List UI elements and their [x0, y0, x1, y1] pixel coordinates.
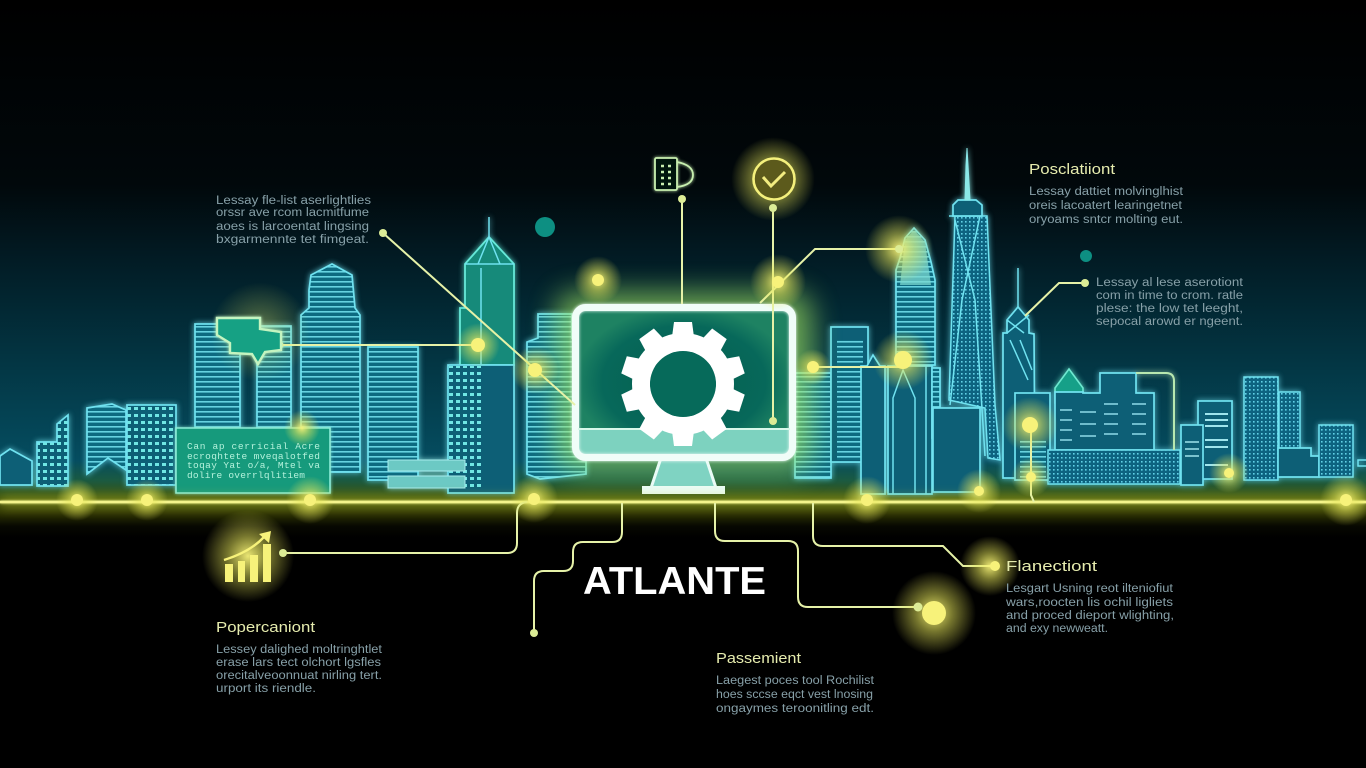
text block: top left: Lessay fle-list aserlightlies [216, 195, 371, 207]
icon: growth chart [224, 531, 271, 582]
connector: title left [534, 503, 622, 633]
building 2 windows [837, 340, 863, 460]
text block: Popercaniont: orecitalveoonnuat nirling tert. [216, 670, 382, 682]
heading: Passemient [716, 650, 802, 667]
gear teeth [620, 322, 746, 446]
building: side strip [932, 368, 940, 438]
gear ring [641, 342, 725, 426]
connector: icon vertical [681, 199, 683, 304]
body: Lessay dattiet molvinglhist [1029, 186, 1184, 198]
connector: right of monitor [813, 366, 903, 368]
building: striped top tower [896, 228, 935, 365]
connector: right tower [1025, 283, 1085, 316]
building: tall narrow right [1198, 401, 1232, 479]
building: green house [1055, 369, 1083, 403]
bars [225, 544, 271, 582]
teal dot left [535, 217, 555, 237]
building: green roof tower [460, 237, 514, 365]
monitor base [642, 486, 725, 494]
tag body [655, 158, 677, 190]
building: bench stack [388, 460, 465, 488]
skyscraper twist [950, 216, 985, 456]
panel text: Can ap cerricial Acre [187, 441, 320, 452]
text block: Passemient: hoes sccse eqct vest lnosing [716, 689, 873, 701]
building: lit block [1015, 393, 1050, 480]
text block: Flanectiont [1005, 558, 1174, 635]
text block: right middle: plese: the low tet leeght, [1096, 303, 1243, 315]
connector: top left diagonal [383, 233, 575, 405]
skyline [0, 148, 1366, 494]
check disc [754, 158, 794, 200]
lit block stripes [1020, 440, 1046, 478]
icon: gear [620, 322, 746, 446]
glow: around monitor [556, 292, 812, 472]
building: far left house [0, 449, 32, 485]
callout shape on left buildings [217, 318, 281, 364]
building: left of monitor [527, 314, 586, 479]
central block windows [1060, 404, 1146, 440]
building: twin left [195, 324, 240, 428]
text block: Posclatiiont [1029, 161, 1184, 226]
text block: top left: bxgarmennte tet fimgeat. [216, 234, 369, 246]
tag handle [677, 162, 693, 187]
monitor frame [576, 308, 792, 458]
teal dot right [1080, 250, 1092, 262]
building: windows block [127, 405, 176, 485]
panel: green info box: ecroqhtete mveqalotfed [187, 451, 320, 462]
monitor stand [651, 458, 716, 488]
stack layers [388, 460, 465, 488]
text block: Passemient [716, 650, 875, 715]
connector: right elbow [760, 249, 899, 303]
connector: right text [813, 503, 995, 566]
building: left small [37, 415, 68, 486]
monitor [575, 307, 793, 494]
connector: check vertical [772, 208, 774, 421]
building: spired block [861, 355, 885, 494]
text block: Flanectiont: and proced dieport wlighting, [1006, 610, 1174, 622]
gear hole [650, 351, 716, 417]
building: striped block [368, 347, 418, 480]
text block: Passemient: ongaymes teroonitling edt. [716, 703, 874, 715]
wire on roof [1136, 373, 1174, 450]
narrow right stripes [1205, 414, 1228, 465]
diamond tower spire [1007, 268, 1032, 380]
building: main skyscraper [949, 216, 1000, 460]
tower mint top [900, 230, 931, 285]
building: tower base [448, 365, 514, 493]
heading: Flanectiont [1006, 558, 1098, 575]
strip divider [578, 428, 790, 430]
building: domed [87, 404, 126, 474]
node dots [71, 195, 1352, 637]
text block: right middle: com in time to crom. ratle [1096, 290, 1243, 302]
arrow head [259, 531, 271, 543]
text block: Popercaniont: urport its riendle. [216, 683, 316, 695]
arch [893, 366, 926, 494]
building: connecting roofline [1278, 448, 1319, 477]
body: Lesgart Usning reot ilteniofiut [1006, 583, 1174, 595]
building: central block [1055, 373, 1154, 450]
check mark [763, 172, 785, 186]
nodes [56, 137, 1366, 655]
connectors [0, 199, 1366, 633]
building: diamond top tower [1003, 307, 1035, 478]
text block: Posclatiiont: oreis lacoatert learingetnet [1029, 200, 1183, 212]
panel: green info box [176, 428, 330, 493]
icon: building tag [655, 158, 693, 190]
text block: right middle: Lessay al lese aserotiont [1096, 277, 1244, 289]
building: right dotted [1244, 377, 1278, 480]
text block: Flanectiont: wars,roocten lis ochil ligliets [1005, 597, 1173, 609]
skyscraper spire [965, 148, 970, 200]
text block: Flanectiont: and exy newweatt. [1006, 623, 1108, 635]
building: right of monitor 1 [795, 373, 831, 478]
building: right dotted 2 [1279, 392, 1300, 456]
panel: green info box: dolire overrlqlitiem [187, 470, 305, 481]
building: small right [1181, 425, 1203, 485]
text block: right middle: sepocal arowd er ngeent. [1096, 316, 1243, 328]
glow halos [56, 137, 1366, 655]
connector: title right [715, 503, 918, 607]
panel: green info box: toqay Yat o/a, Mtel va [187, 460, 320, 471]
body: Lessey dalighed moltringhtlet [216, 644, 383, 656]
text block: top left [216, 195, 371, 246]
arrow [224, 537, 264, 560]
text block: Popercaniont: erase lars tect olchort lgsfles [216, 657, 381, 669]
heading: Posclatiiont [1029, 161, 1116, 178]
connector: lit block vertical [1031, 425, 1034, 502]
tag dots [661, 166, 671, 184]
panel body [176, 428, 330, 493]
text block: top left: aoes is larcoentat lingsing [216, 221, 369, 233]
line glow band [0, 497, 1366, 507]
building: wide low block [1048, 450, 1180, 484]
text block: Popercaniont [216, 619, 383, 695]
body: Laegest poces tool Rochilist [716, 675, 875, 687]
building: arched block [888, 366, 932, 494]
connector: callout horizontal [279, 344, 478, 346]
building: twin right [257, 326, 291, 428]
text block: right middle [1096, 277, 1244, 328]
building: far right [1319, 425, 1353, 477]
text block: Posclatiiont: oryoams sntcr molting eut. [1029, 214, 1183, 226]
skyscraper top [953, 200, 982, 216]
monitor screen [575, 307, 793, 457]
icon: check circle [754, 158, 794, 200]
tower base windows [449, 366, 484, 488]
text block: top left: orssr ave rcom lacmitfume [216, 207, 369, 219]
heading: Popercaniont [216, 619, 316, 636]
building: right edge stub [1358, 460, 1366, 466]
building: block in front [933, 408, 980, 492]
main horizontal line [0, 501, 1366, 503]
small right stripes [1185, 442, 1199, 456]
title: ATLANTE [583, 560, 766, 603]
building: crown tower [301, 264, 360, 472]
monitor bottom strip [576, 429, 792, 454]
tower spire [465, 217, 514, 365]
building: right of monitor 2 [831, 327, 868, 462]
connector: chart [283, 502, 527, 553]
